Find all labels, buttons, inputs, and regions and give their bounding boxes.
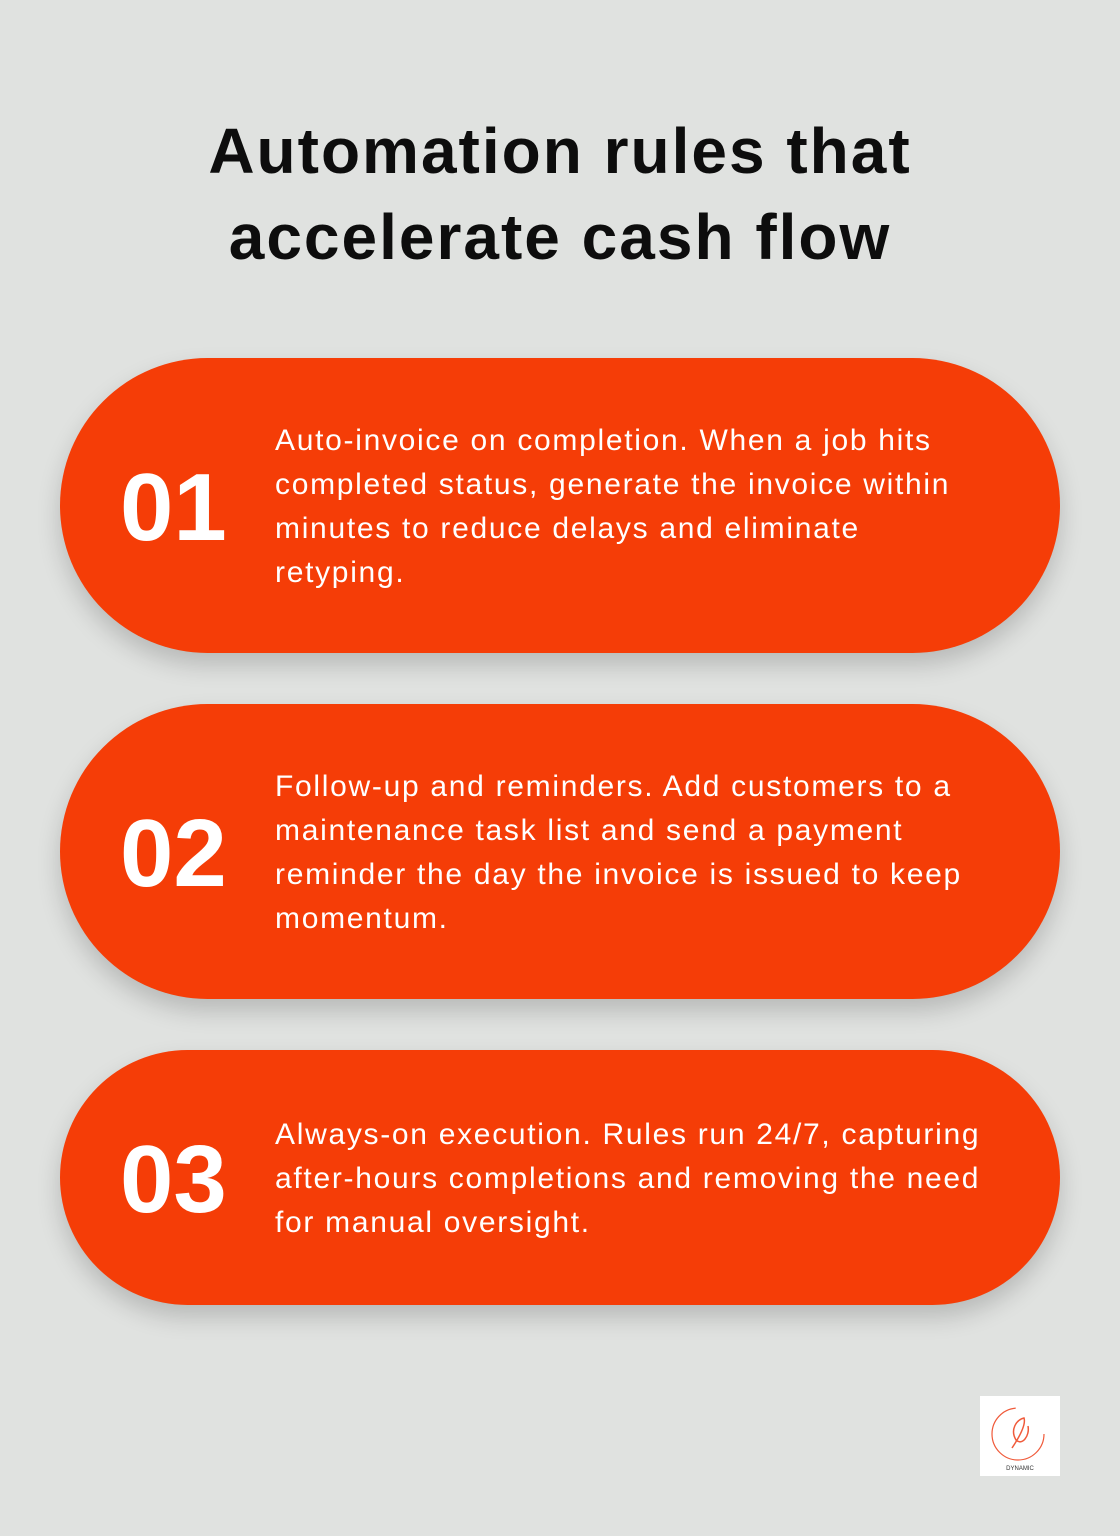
icon: logo bbox=[980, 1396, 1060, 1476]
title: accelerate cash flow bbox=[229, 201, 891, 273]
panel: step 01 bbox=[60, 358, 1060, 653]
text 03: Always-on execution. Rules run 24/7, capturing bbox=[275, 1118, 980, 1151]
text 01: completed status, generate the invoice within bbox=[275, 468, 950, 501]
text 02: maintenance task list and send a payment bbox=[275, 814, 903, 847]
text 02: Follow-up and reminders. Add customers to a bbox=[275, 770, 952, 803]
text 03: for manual oversight. bbox=[275, 1206, 591, 1239]
text 01: retyping. bbox=[275, 556, 405, 589]
text 03 bbox=[275, 1118, 980, 1239]
text 02: reminder the day the invoice is issued to keep bbox=[275, 858, 962, 891]
text 01: Auto-invoice on completion. When a job hits bbox=[275, 424, 932, 457]
text 02: momentum. bbox=[275, 902, 449, 935]
icon: logo: DYNAMIC bbox=[1006, 1466, 1034, 1472]
number 03: 03 bbox=[120, 1126, 227, 1233]
text 01 bbox=[275, 424, 950, 589]
panel: step 03 bbox=[60, 1050, 1060, 1305]
title bbox=[208, 115, 912, 273]
number 01: 01 bbox=[120, 454, 227, 561]
text 01: minutes to reduce delays and eliminate bbox=[275, 512, 860, 545]
number 02: 02 bbox=[120, 800, 227, 907]
title: Automation rules that bbox=[208, 115, 912, 187]
text 03: after-hours completions and removing the need bbox=[275, 1162, 980, 1195]
text 02 bbox=[275, 770, 962, 935]
panel: step 02 bbox=[60, 704, 1060, 999]
